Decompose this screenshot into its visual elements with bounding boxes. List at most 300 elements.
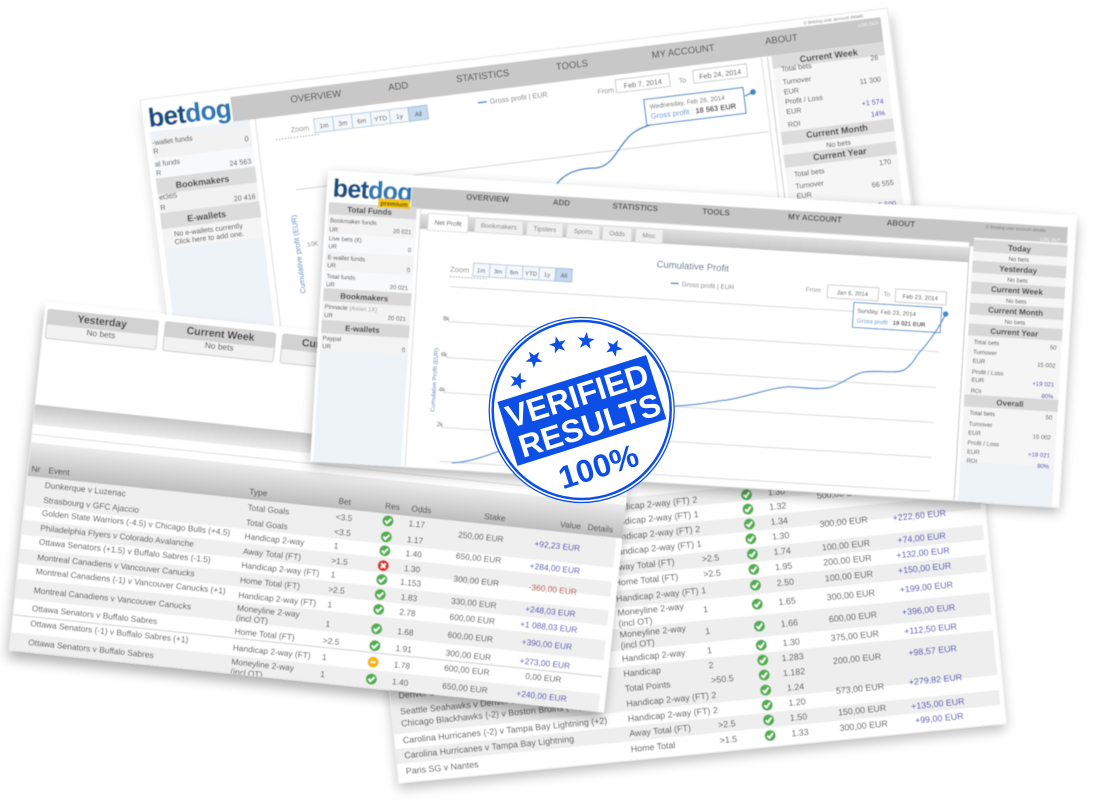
right statistics column: EUR: [786, 106, 802, 116]
chart panel: To: [883, 291, 891, 299]
bet values: 1: [327, 599, 333, 610]
right statistics column: 50: [1045, 415, 1053, 422]
stakes: [816, 486, 888, 733]
stakes: 600,00 EUR: [449, 612, 495, 626]
bet types: Home Total (FT): [234, 626, 295, 642]
sheet: back dashboard with gross profit chart: [140, 8, 922, 366]
tooltip: Wednesday, Feb 26, 2014: [649, 95, 726, 111]
stakes: 600,00 EUR: [444, 663, 490, 677]
chart panel: [405, 209, 970, 501]
right statistics column: Turnover: [795, 178, 825, 191]
bet values: >1.5: [719, 734, 738, 745]
profit values: +132,00 EUR: [896, 545, 950, 560]
chart panel: Cumulative Profit (EUR): [430, 348, 440, 412]
left funds column: 20 021: [387, 316, 407, 323]
left funds column: UR: [322, 344, 332, 351]
main menu: LOG OUT: [858, 20, 879, 28]
right statistics column: No bets: [826, 138, 852, 150]
bet values: 2: [708, 660, 714, 670]
bet types: Away Total (FT): [613, 557, 675, 573]
stakes: 100,00 EUR: [821, 538, 870, 553]
result icons: [741, 489, 776, 742]
odds: 1.74: [773, 545, 791, 557]
table header: Odds: [411, 503, 432, 515]
stakes: 300,00 EUR: [819, 515, 868, 529]
left funds column: E-wallets: [345, 324, 380, 335]
stakes: 300,00 EUR: [839, 718, 888, 733]
tooltip: Sunday, Feb 23, 2014: [857, 309, 917, 318]
odds: 1.65: [778, 595, 796, 607]
bet types: Handicap 2-way: [244, 531, 306, 547]
odds: 1.283: [781, 651, 804, 663]
event names: [28, 480, 235, 667]
chart line: cumulative profit: [452, 311, 948, 463]
main menu: MY ACCOUNT: [788, 212, 842, 224]
right statistics column: +19 021: [1032, 381, 1055, 389]
odds: 1.30: [782, 636, 800, 648]
stakes: 100,00 EUR: [824, 569, 874, 583]
bet types: Total Goals: [247, 502, 290, 517]
table header: Res: [385, 501, 400, 512]
tabs: [428, 213, 663, 245]
left funds column: UR: [329, 227, 339, 234]
logo: betdog: betdog: [146, 93, 233, 133]
left funds column: Pinnacle (Asian 1X): [324, 305, 377, 314]
right statistics column: Total bets: [969, 411, 995, 418]
bet types: (incl OT): [236, 613, 269, 626]
stakes: 300,00 EUR: [453, 574, 499, 588]
chart panel: Feb 23, 2014: [902, 294, 939, 303]
bet types: Moneyline 2-way: [617, 601, 685, 618]
bet values: 1: [705, 626, 711, 636]
odds: [392, 520, 426, 686]
chart panel: Gross profit | EUR: [681, 281, 735, 292]
right statistics column: Profit / Loss: [972, 370, 1004, 378]
profit values: +248,03 EUR: [525, 604, 576, 619]
odds: 1.68: [397, 626, 414, 638]
main menu: TOOLS: [702, 207, 731, 218]
stakes: 250,00 EUR: [458, 529, 504, 544]
profit values: +74,00 EUR: [897, 530, 946, 545]
bet types: Total Goals: [246, 517, 288, 531]
odds: 1.50: [789, 711, 808, 723]
table header: Details: [587, 522, 614, 535]
right statistics column: Turnover: [973, 350, 997, 357]
right statistics column: 80%: [1041, 394, 1054, 401]
left funds column: UR: [326, 282, 335, 289]
stakes: 330,00 EUR: [451, 596, 497, 610]
tabs: Bookmakers: [481, 222, 518, 232]
odds: 1.20: [788, 696, 806, 708]
right statistics column: No bets: [1008, 257, 1029, 264]
bet values: >2.5: [701, 552, 720, 564]
chart area: zoom buttons and date range: 3m: [338, 120, 348, 128]
stakes: 200,00 EUR: [823, 553, 872, 568]
bet types: Handicap 2-way (FT): [616, 586, 699, 604]
right statistics column: EUR: [783, 86, 799, 96]
table row stripes: [373, 463, 1000, 764]
sheet: front dashboard with cumulative profit chart: [310, 170, 1077, 512]
stakes: 300,00 EUR: [826, 588, 875, 602]
stakes: 500,00 EUR: [816, 486, 865, 501]
profit values: +99,00 EUR: [915, 711, 964, 726]
profit values: +273,00 EUR: [519, 656, 571, 671]
profit values: +222,60 EUR: [892, 508, 947, 523]
banner text: 100%: [554, 437, 643, 496]
left funds column: UR: [327, 263, 337, 270]
event names: Dunkerque v Luzenac: [44, 480, 126, 498]
right statistics column: Current Year: [812, 146, 868, 162]
right statistics column: Today: [1008, 244, 1032, 254]
right statistics column: Current Month: [806, 123, 868, 140]
event names: Ottawa Senators (-1) v Buffalo Sabres (+1): [30, 618, 189, 645]
bet types: Moneyline 2-way: [231, 656, 295, 673]
left funds column: 0: [408, 248, 412, 254]
odds: 1.30: [772, 530, 790, 542]
right statistics column: [958, 238, 1068, 507]
stakes: 650,00 EUR: [455, 551, 502, 565]
chart panel: Jan 6, 2014: [837, 290, 869, 298]
left funds column: Total funds: [326, 274, 356, 282]
chart panel: 4k: [439, 387, 446, 394]
event names: Chicago Blackhawks (-2) v Boston Bruins (+2): [401, 701, 582, 728]
chart panel: Zoom: [450, 265, 470, 275]
left funds column: [313, 202, 417, 467]
main menu: ABOUT: [886, 218, 915, 229]
event names: Ottawa Senators v Buffalo Sabres: [28, 637, 154, 660]
bet types: Home Total (FT): [614, 572, 679, 588]
banner text: [497, 355, 679, 507]
banner text: VERIFIED: [501, 356, 653, 435]
bet types: Handicap 2-way: [621, 648, 686, 664]
tooltip: Gross profit : 18 563 EUR: [650, 101, 737, 121]
event names: Ottawa Senators v Buffalo Sabres: [31, 603, 158, 626]
right statistics column: EUR: [967, 450, 980, 456]
event names: Montreal Canadiens v Vancouver Canucks: [37, 552, 195, 578]
left funds column: 20 416: [233, 192, 256, 203]
stakes: 375,00 EUR: [830, 628, 879, 643]
right statistics column: [767, 42, 911, 282]
zoom buttons: 6m: [510, 270, 518, 277]
bet values: >1.5: [331, 555, 349, 567]
summary boxes: [44, 308, 318, 368]
chart area: zoom buttons and date range: To: [678, 75, 687, 85]
zoom buttons: YTD: [525, 271, 538, 278]
left funds column: 20 021: [389, 285, 409, 292]
right statistics column: 170: [879, 157, 892, 167]
bet types: Handicap 2-way (FT): [607, 495, 690, 513]
odds: 1.17: [407, 534, 424, 546]
tabs: Tipsters: [533, 226, 557, 234]
chart area: zoom buttons and date range: Feb 7, 2014: [623, 77, 662, 90]
right statistics column: +1 574: [861, 96, 884, 108]
event names: Paris SG v Nantes: [405, 759, 480, 776]
odds: 1.30: [767, 486, 786, 498]
left funds column: E-wallets: [187, 209, 227, 224]
right statistics column: 15 002: [1032, 435, 1052, 442]
stakes: 573,00 EUR: [835, 681, 885, 696]
event names: Montreal Canadiens v Vancouver Canucks: [33, 585, 192, 612]
right statistics column: +19 021: [1028, 452, 1051, 460]
tooltip: [852, 302, 942, 333]
main menu: MY ACCOUNT: [651, 43, 715, 61]
right statistics column: Current Year: [990, 327, 1039, 339]
odds: [765, 486, 812, 739]
right statistics column: EUR: [971, 378, 985, 384]
table header: Nr: [31, 463, 41, 474]
main menu: ABOUT: [765, 32, 799, 47]
right statistics column: Profit / Loss: [784, 93, 824, 106]
right statistics column: Yesterday: [999, 264, 1038, 276]
left funds column: Live bets (€): [329, 236, 362, 244]
right statistics column: Profit / Loss: [797, 198, 837, 212]
profit values: +199,00 EUR: [899, 580, 954, 595]
table header: Event: [48, 465, 71, 477]
chart area: zoom buttons and date range: 10K: [307, 240, 320, 249]
chart panel: 8k: [443, 316, 451, 323]
left funds column: Bookmakers: [340, 291, 389, 303]
main menu: STATISTICS: [455, 68, 510, 85]
bet values: >2.5: [718, 718, 736, 730]
odds: 1.66: [780, 617, 798, 629]
bet values: 2: [695, 524, 701, 534]
right statistics column: ROI: [970, 389, 982, 395]
bet types: Handicap 2-way (FT): [627, 706, 711, 724]
stamp: verified results 100%: [489, 318, 679, 507]
bet types: Handicap 2-way (FT): [608, 510, 692, 528]
right statistics column: 66 555: [871, 178, 894, 189]
profit values: +92,23 EUR: [534, 538, 581, 553]
bet values: [319, 512, 353, 680]
left funds column: R: [153, 146, 159, 156]
right statistics column: 15 002: [1037, 363, 1056, 370]
bet types: Total Points: [624, 679, 672, 694]
odds: 1.83: [400, 592, 418, 603]
event names: Golden State Warriors (-4.5) v Chicago Bulls (+4.5): [41, 508, 231, 538]
bet values: 2: [692, 495, 698, 505]
odds: 1.182: [783, 666, 806, 678]
main menu: TOOLS: [555, 58, 589, 73]
bet values: 1: [333, 540, 339, 551]
right statistics column: Current Week: [991, 285, 1044, 297]
right statistics column: EUR: [968, 431, 982, 437]
odds: 1.34: [770, 515, 788, 527]
chart area: zoom buttons and date range: All: [414, 111, 423, 119]
left funds column: [150, 120, 277, 357]
stakes: 200,00 EUR: [833, 651, 882, 666]
bet types: Moneyline 2-way: [237, 603, 301, 619]
bet types: Handicap 2-way (FT): [232, 642, 311, 661]
table header: Value: [560, 519, 582, 531]
bet values: 1: [707, 645, 713, 655]
odds: 1.78: [393, 659, 411, 671]
left funds column: UR: [324, 313, 334, 320]
tabs: Sports: [574, 228, 594, 236]
right statistics column: Total bets: [780, 61, 813, 74]
bet types: (incl OT): [230, 666, 263, 680]
odds: 1.17: [408, 518, 426, 530]
bet types: Moneyline 2-way: [619, 623, 687, 640]
main menu: OVERVIEW: [466, 192, 510, 204]
profit values: [892, 508, 966, 726]
left funds column: et365: [158, 191, 177, 202]
bet values: 1: [320, 669, 326, 679]
bet types: Away Total (FT): [629, 723, 691, 739]
bet values: 1: [693, 509, 699, 519]
right statistics column: ROI: [966, 459, 978, 465]
right statistics column: 80%: [1037, 464, 1050, 471]
bet values: [692, 493, 740, 746]
main menu: ADD: [388, 80, 409, 94]
profit values: +284,00 EUR: [529, 561, 581, 576]
tabs: Net Profit: [434, 220, 462, 228]
profit values: 0,00 EUR: [525, 671, 562, 685]
right statistics column: No bets: [1007, 278, 1028, 285]
summary boxes: Current Week: [186, 325, 255, 344]
stars: [506, 331, 626, 392]
profit values: +240,00 EUR: [516, 688, 567, 704]
table header: Type: [249, 486, 268, 498]
bet values: >2.5: [703, 568, 721, 579]
bet values: <3.5: [335, 512, 353, 523]
main menu: STATISTICS: [612, 201, 659, 213]
zoom buttons: 3m: [494, 269, 502, 276]
chart area: zoom buttons and date range: 6m: [357, 118, 367, 126]
right statistics column: EUR: [972, 359, 986, 366]
right statistics column: 26: [870, 53, 879, 63]
profit values: +396,00 EUR: [901, 602, 956, 617]
bet types: Home Total: [630, 740, 676, 754]
chart area: zoom buttons and date range: Zoom: [290, 123, 310, 134]
event names: Denver Broncos (-5) v Seattle Seahawks (+5): [398, 673, 577, 701]
odds: 1.40: [405, 548, 423, 560]
odds: 2.50: [776, 577, 794, 588]
bet values: 2: [712, 705, 718, 715]
main menu: [288, 11, 880, 106]
right statistics column: No bets: [1006, 299, 1027, 306]
right statistics column: No bets: [1004, 320, 1025, 327]
bet types: (incl OT): [618, 616, 653, 629]
event names: Philadelphia Flyers v Colorado Avalanche: [40, 523, 195, 549]
chart area: zoom buttons and date range: 1m: [319, 122, 329, 130]
chart area: zoom buttons and date range: YTD: [374, 115, 388, 124]
right statistics column: EUR: [796, 190, 812, 201]
profit values: +1 088,03 EUR: [520, 619, 578, 635]
tabs: Misc: [642, 232, 657, 240]
profit values: +112,50 EUR: [904, 621, 957, 636]
tooltip: Gross profit : 19 021 EUR: [857, 319, 926, 329]
bet values: >50.5: [711, 673, 734, 685]
left funds column: Paypal: [322, 336, 341, 343]
chart panel: 6k: [441, 352, 448, 359]
profit values: [516, 540, 580, 702]
event names: Carolina Hurricanes v Tampa Bay Lightning: [404, 734, 575, 760]
banner text: RESULTS: [514, 386, 665, 465]
right statistics column: 14%: [870, 108, 886, 119]
bet types: Home Total (FT): [240, 575, 301, 591]
profit values: +150,00 EUR: [897, 561, 952, 576]
left funds column: Click here to add one.: [174, 229, 245, 246]
tooltip: [644, 87, 746, 125]
odds: 1.40: [392, 676, 409, 688]
stakes: [442, 529, 504, 695]
odds: 1.32: [769, 500, 787, 512]
bet values: 1: [325, 619, 331, 629]
chart panel: 2k: [436, 422, 444, 429]
right statistics column: Total bets: [973, 340, 999, 347]
odds: 1.91: [395, 643, 413, 655]
left funds column: 20 021: [393, 229, 412, 236]
chart area: zoom buttons and date range: 1y: [396, 113, 404, 121]
tabs: Odds: [609, 230, 626, 238]
left funds column: 0: [244, 134, 249, 144]
main menu: © Betdog user account details: [986, 223, 1047, 233]
bet values: 1: [322, 652, 328, 662]
event names: Montreal Canadiens (-1) v Vancouver Canucks (+1): [35, 566, 226, 596]
bet types: Handicap 2-way (FT): [238, 590, 317, 608]
right statistics column: 50: [1050, 345, 1057, 352]
profit values: +98,57 EUR: [908, 643, 957, 658]
right statistics column: Current Week: [799, 47, 859, 64]
summary boxes: No bets: [86, 327, 116, 340]
bet values: >2.5: [328, 584, 346, 596]
main menu: [466, 191, 1061, 243]
right statistics column: 11 300: [859, 75, 882, 86]
left funds column: Bookmakers: [175, 174, 230, 190]
stakes: 150,00 EUR: [838, 703, 887, 717]
chart panel: From: [805, 286, 821, 294]
right statistics column: Turnover: [968, 422, 993, 429]
bet types: Handicap 2-way (FT): [610, 525, 693, 543]
profit values: +279,82 EUR: [908, 672, 963, 687]
bet types: [230, 504, 320, 678]
event names: Ottawa Senators (+1.5) v Buffalo Sabres (-1.5): [38, 537, 211, 565]
stakes: 300,00 EUR: [445, 648, 492, 662]
stakes: 600,00 EUR: [447, 630, 494, 644]
left funds column: R: [160, 203, 166, 212]
left funds column: -wallet funds: [152, 133, 193, 147]
chart area: zoom buttons and date range: Cumulative profit (EUR): [289, 214, 308, 294]
odds: 1.95: [775, 561, 793, 572]
chart panel: Cumulative Profit: [656, 259, 730, 275]
table header: [28, 442, 626, 539]
odds: 1.33: [791, 727, 809, 738]
odds: 2.78: [399, 607, 416, 618]
chart line: gross profit: [556, 89, 756, 185]
bet types: Handicap 2-way (FT): [626, 691, 709, 709]
left funds column: 0: [406, 268, 411, 274]
right statistics column: +5 500: [874, 199, 897, 210]
stakes: 650,00 EUR: [442, 681, 488, 695]
logo: betdog premium: betdog: [332, 174, 413, 207]
chart area: zoom buttons and date range: [255, 57, 789, 344]
right statistics column: Profit / Loss: [967, 441, 999, 448]
summary boxes: No bets: [204, 340, 234, 353]
logo: betdog premium: premium: [380, 200, 408, 209]
chart area: zoom buttons and date range: Feb 24, 2014: [699, 67, 742, 81]
bet types: (incl OT): [620, 637, 655, 651]
bet values: 2: [711, 690, 717, 700]
profit values: +390,00 EUR: [521, 637, 573, 652]
event names: Strasbourg v GFC Ajaccio: [43, 495, 140, 515]
table row stripes: [9, 476, 616, 712]
right statistics column: ROI: [787, 119, 801, 129]
summary boxes: Yesterday: [77, 313, 128, 331]
left funds column: 24 563: [229, 156, 252, 168]
summary boxes: Current Month: [301, 337, 375, 357]
bet values: 1: [703, 604, 709, 614]
odds: 1.24: [786, 681, 805, 693]
